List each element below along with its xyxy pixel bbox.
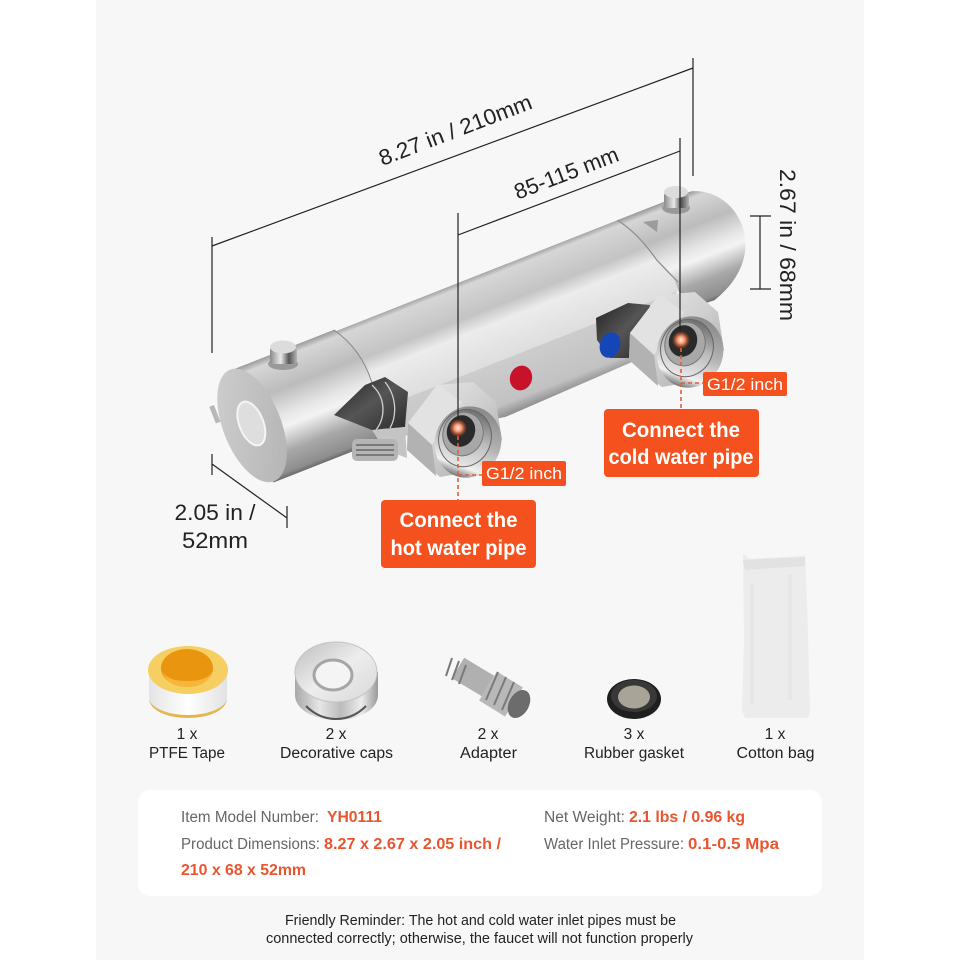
- callout: cold water: cold water pipe: [608, 446, 754, 469]
- blue cold marker: [596, 329, 624, 361]
- dimension: overall length: 8.27 in / 210mm: [375, 89, 535, 171]
- dimension: inlet spacing: 85-115 mm: [510, 142, 622, 204]
- label: 1 x: [177, 726, 198, 743]
- spec: product dimensions: 210 x 68 x 52mm: [181, 862, 306, 879]
- spec: net weight: [544, 809, 745, 826]
- housing below recess: [372, 427, 407, 458]
- dimension: height: 2.67 in / 68mm: [775, 169, 800, 321]
- dark recess right: [596, 303, 650, 358]
- dark recess left: [334, 377, 408, 430]
- label: adapter: Adapter: [460, 745, 517, 762]
- cold water nut: [629, 292, 733, 397]
- arrow mark: [643, 220, 658, 232]
- dimension: inlet spacing: [458, 138, 680, 420]
- dimension: depth: [174, 454, 287, 553]
- callout: hot water: Connect the: [400, 509, 518, 532]
- dimension: height: [750, 169, 800, 321]
- label: decorative caps: Decorative caps: [280, 745, 393, 762]
- friendly reminder note: connected correctly; otherwise, the faucet will not function properly: [266, 931, 694, 947]
- red hot marker: [506, 362, 536, 394]
- spec: water inlet pressure: [544, 836, 779, 853]
- label: cotton bag: Cotton bag: [736, 745, 814, 762]
- spec: water inlet pressure: Water Inlet Pressure:: [544, 836, 684, 853]
- spec: product dimensions: [181, 836, 502, 879]
- dimension: overall length: [212, 58, 693, 353]
- hot water nut: [407, 382, 511, 487]
- label: PTFE tape: PTFE Tape: [149, 745, 225, 762]
- dimension: depth: 52mm: [182, 528, 248, 553]
- spec: product dimensions: Product Dimensions:: [181, 836, 320, 853]
- spec: model number: Item Model Number:: [181, 809, 319, 826]
- label: 2 x: [478, 726, 499, 743]
- accessory: cotton bag: [742, 553, 810, 743]
- label: 3 x: [624, 726, 645, 743]
- spec: model number: YH0111: [327, 809, 382, 826]
- accessory: decorative cap: [295, 642, 378, 743]
- spec: net weight: Net Weight:: [544, 809, 625, 826]
- callout: cold water: [604, 331, 787, 477]
- label: rubber gasket: Rubber gasket: [584, 745, 685, 762]
- product: thermostatic valve body: [199, 176, 776, 517]
- knob left: [268, 340, 298, 370]
- spec: product dimensions: 8.27 x 2.67 x 2.05 inch /: [324, 836, 502, 853]
- callout: hot water: hot water pipe: [390, 537, 526, 560]
- friendly reminder note: [266, 913, 694, 947]
- knob right: [662, 186, 690, 214]
- accessory: rubber gasket: [607, 679, 661, 743]
- dimension: depth: 2.05 in /: [174, 500, 256, 525]
- friendly reminder note: Friendly Reminder: The hot and cold water inlet pipes must be: [285, 913, 676, 929]
- adapter thread under valve: [352, 439, 398, 461]
- accessory: adapter: [446, 658, 535, 743]
- spec: model number: [181, 809, 382, 826]
- panel: specifications: [138, 790, 822, 896]
- background panel: [96, 0, 864, 960]
- label: 2 x: [326, 726, 347, 743]
- accessory: PTFE tape: [148, 646, 228, 743]
- spec: water inlet pressure: 0.1-0.5 Mpa: [688, 836, 779, 853]
- callout: cold water: G1/2 inch: [707, 375, 783, 394]
- valve cylinder body: [199, 176, 776, 517]
- callout: cold water: Connect the: [622, 419, 740, 442]
- spec: net weight: 2.1 lbs / 0.96 kg: [629, 809, 745, 826]
- callout: hot water: [381, 419, 566, 568]
- label: 1 x: [765, 726, 786, 743]
- callout: hot water: G1/2 inch: [486, 464, 562, 483]
